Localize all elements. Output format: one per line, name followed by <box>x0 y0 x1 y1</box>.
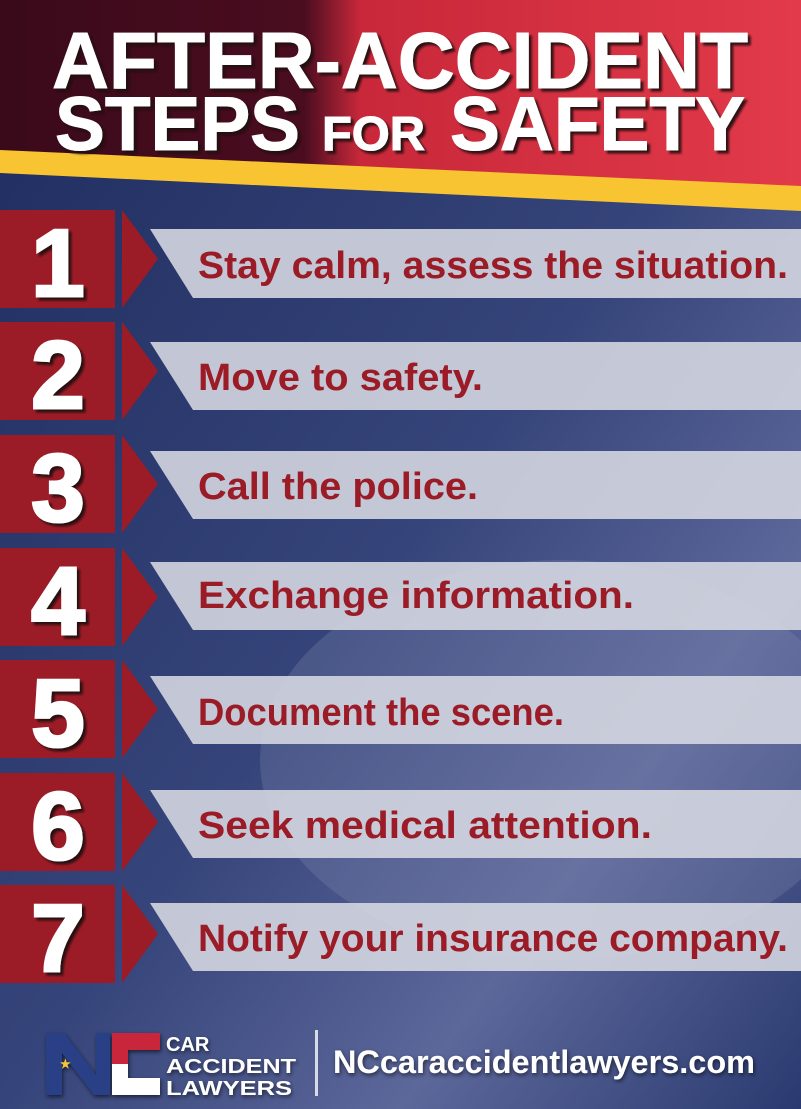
title <box>52 16 748 167</box>
step 5: 5 <box>31 660 85 767</box>
step 5 <box>0 660 801 767</box>
yellow stripe <box>0 150 801 211</box>
logo C letter <box>112 1033 160 1095</box>
footer logo: ★ <box>60 1057 71 1071</box>
footer logo: LAWYERS <box>166 1078 292 1100</box>
footer logo: ACCIDENT <box>166 1056 296 1078</box>
step 1: 1 <box>31 210 85 317</box>
title: STEPS <box>55 82 300 167</box>
step 6: 6 <box>31 773 85 880</box>
logo N letter <box>46 1033 110 1095</box>
step 2 <box>0 322 801 429</box>
step 5: Document the scene. <box>198 692 564 734</box>
step 2: 2 <box>31 322 85 429</box>
step 3 <box>0 435 801 542</box>
step 4: Exchange information. <box>198 575 634 617</box>
logo text: CAR <box>166 1034 210 1056</box>
footer logo <box>46 1033 296 1100</box>
step 7: Notify your insurance company. <box>198 918 788 960</box>
steps list <box>0 210 801 992</box>
step 7: 7 <box>31 885 85 992</box>
step 1 <box>0 210 801 317</box>
step 6 <box>0 773 801 880</box>
step 1: Stay calm, assess the situation. <box>198 245 788 287</box>
title: SAFETY <box>450 82 745 167</box>
step 7 <box>0 885 801 992</box>
step 4: 4 <box>31 548 85 655</box>
website url: NCcaraccidentlawyers.com <box>333 1044 755 1080</box>
step 2: Move to safety. <box>198 357 483 399</box>
step 3: Call the police. <box>198 466 478 508</box>
step 4 <box>0 548 801 655</box>
title: AFTER-ACCIDENT <box>52 16 748 105</box>
step 6: Seek medical attention. <box>198 805 652 847</box>
title: FOR <box>322 108 425 161</box>
header background <box>0 0 801 190</box>
step 3: 3 <box>31 435 85 542</box>
